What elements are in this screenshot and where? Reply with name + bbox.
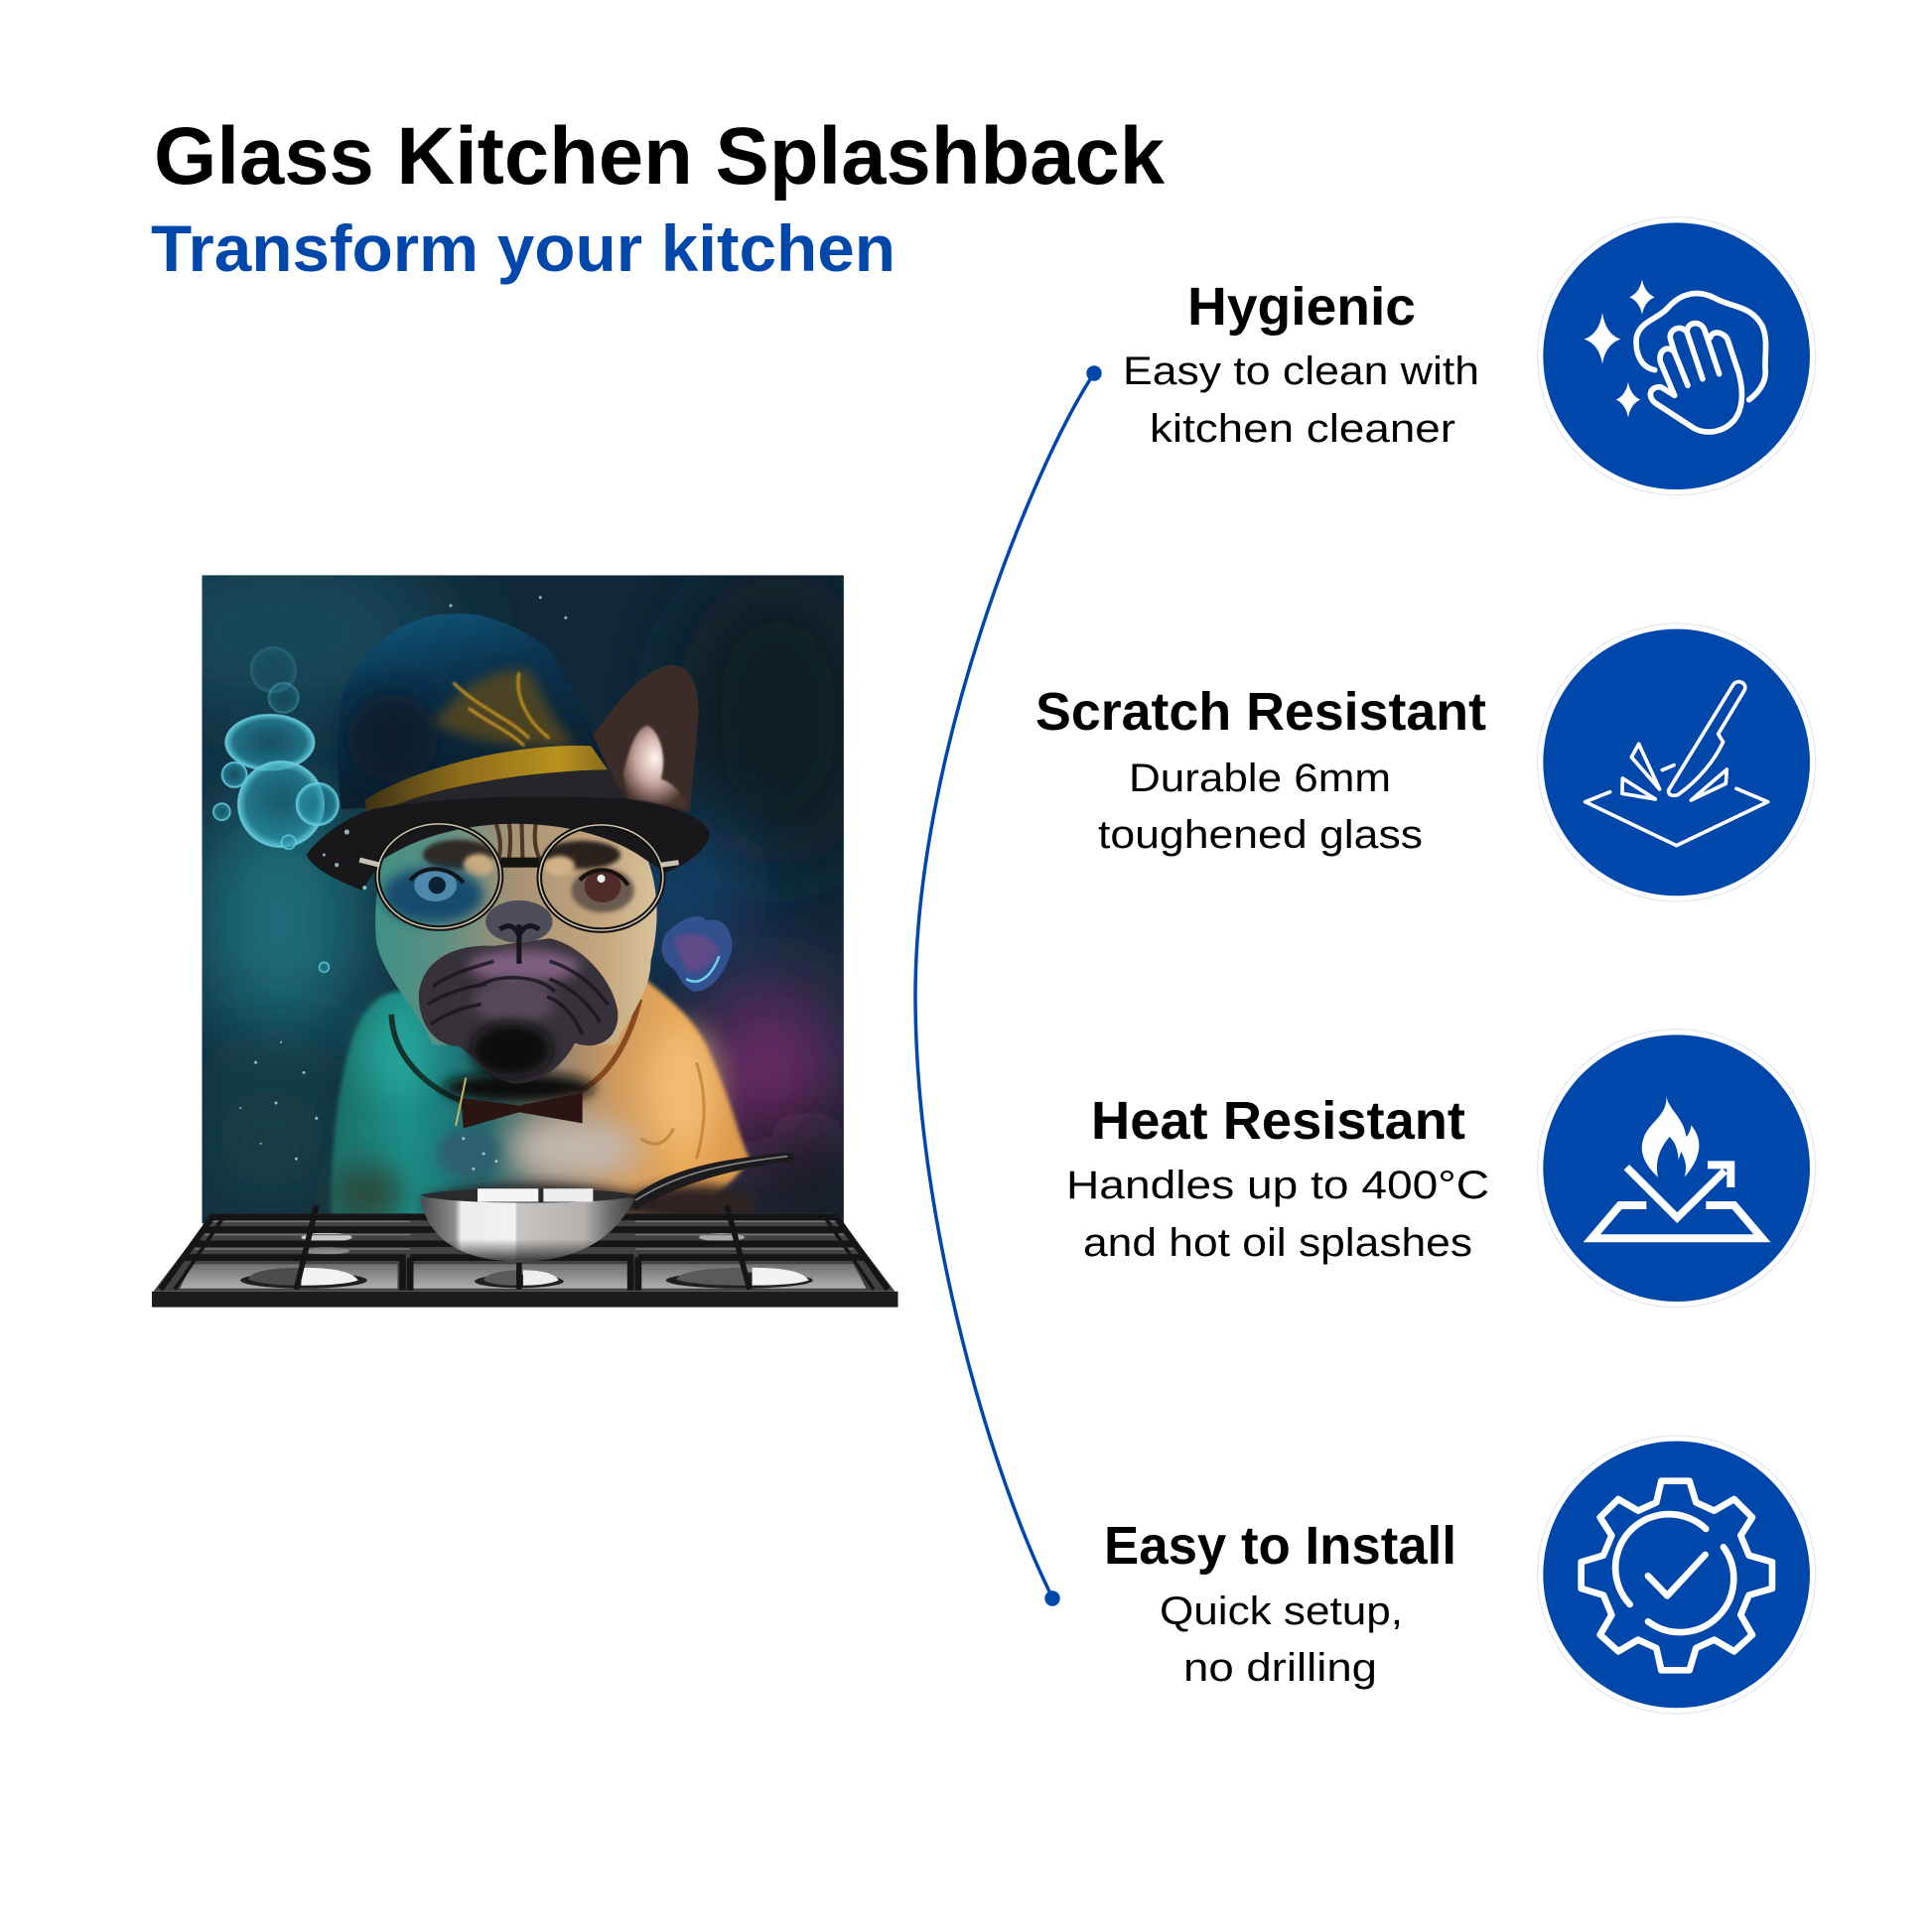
title: Glass Kitchen Splashback [154,111,1165,202]
artwork background [202,575,844,1223]
subtitle: Transform your kitchen [151,211,896,285]
gas hob [152,1153,897,1308]
connector curve with end dots [915,365,1102,1606]
feature text: Easy to Install: Quick setup, [1160,1589,1403,1633]
burners [240,1233,813,1289]
panel: dog artwork [202,575,844,1223]
feature text: Easy to Install [1104,1516,1456,1690]
icon: knife scratching a surface [1538,623,1816,901]
muzzle [419,938,618,1084]
right eye [571,868,634,912]
feature text: Hygienic [1123,277,1479,451]
feature text: Easy to Install: no drilling [1183,1646,1377,1690]
water splatter [239,596,567,1171]
feature text: Hygienic: Hygienic [1187,277,1416,337]
hob base [153,1213,895,1292]
feature text: Hygienic: kitchen cleaner [1150,407,1455,451]
nose [485,900,553,943]
forehead wrinkles [496,822,540,860]
front rail [152,1292,897,1308]
product image: splashback with dog artwork above a gas hob [119,541,897,1308]
hat band [364,746,608,817]
feature text: Scratch Resistant [1035,682,1486,857]
glasses [359,824,679,930]
bubbles at left [213,647,339,972]
hat brim [307,796,709,891]
feature text: Heat Resistant [1066,1091,1489,1265]
feature text: Scratch Resistant: Scratch Resistant [1035,682,1486,742]
eye patches [423,840,493,870]
frying pan [420,1153,794,1261]
icon: hand wiping with sparkles [1538,217,1816,495]
dog body [332,971,758,1224]
grate bar highlights [195,1221,854,1249]
left eye [382,868,483,923]
feature text: Easy to Install: Easy to Install [1104,1516,1456,1576]
feature text: Heat Resistant: Heat Resistant [1091,1091,1465,1151]
grate bars [161,1205,888,1291]
dog head [375,822,657,1084]
bubble at right [662,916,733,992]
muzzle wrinkles [428,961,608,1035]
steel tray panels [180,1264,866,1289]
icon: flame deflected by surface [1538,1030,1816,1308]
feature text: Scratch Resistant: Durable 6mm [1129,757,1391,800]
hat [307,614,709,891]
feature text: Scratch Resistant: toughened glass [1098,813,1423,857]
icon: gear with check mark [1538,1436,1816,1714]
feature text: Hygienic: Easy to clean with [1123,349,1479,393]
feature text: Heat Resistant: Handles up to 400°C [1066,1164,1489,1207]
feature text: Heat Resistant: and hot oil splashes [1083,1221,1472,1265]
bow tie [456,1078,583,1129]
dog ear [593,665,698,812]
